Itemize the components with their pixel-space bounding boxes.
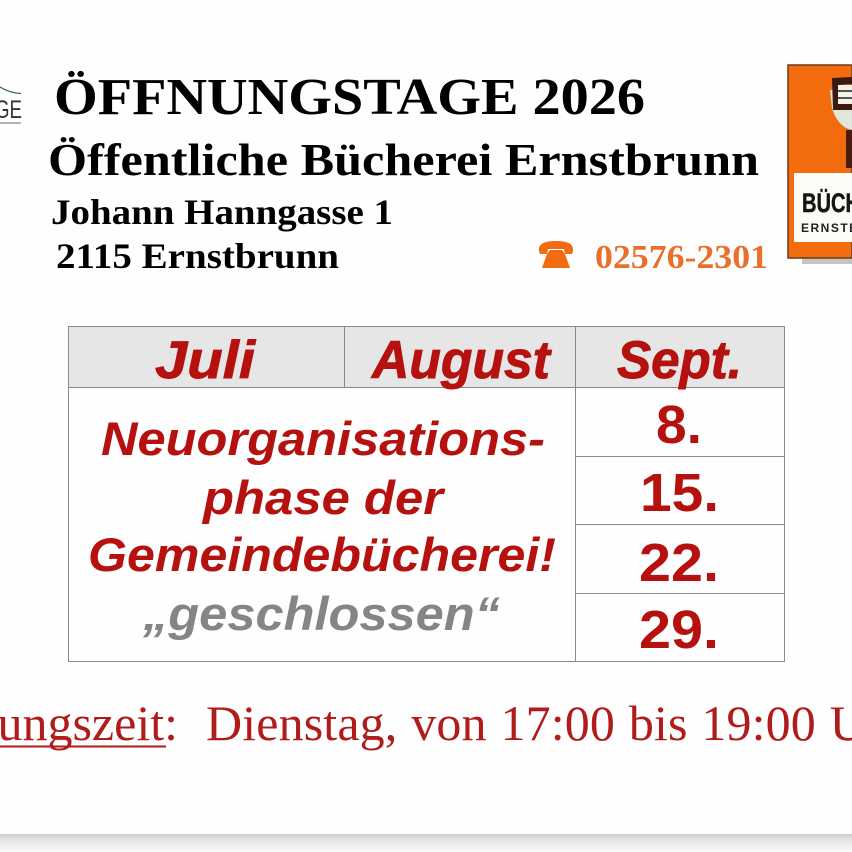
phone contact [539,239,768,276]
library name: Öffentliche Bücherei Ernstbrunn [48,134,759,185]
phone number: 02576-2301 [595,239,768,276]
address block: 2115 Ernstbrunn [56,236,339,276]
icon: library logo [788,65,852,264]
September dates: 22. [639,533,719,593]
month headers: Juli [155,331,256,390]
month headers: August [370,331,552,390]
table header background [68,326,784,388]
icon: cropped partner logo [0,87,22,124]
table grid [68,326,785,662]
September dates: 8. [656,395,702,455]
closure notice: Neuorganisations- [101,412,545,465]
address block [51,192,393,276]
month headers [155,331,742,390]
September dates [639,395,719,660]
title: ÖFFNUNGSTAGE 2026 [54,69,645,126]
month headers: Sept. [617,331,742,390]
page shadow strip [0,834,852,852]
schedule table [68,326,785,662]
September dates: 15. [640,463,719,523]
icon: telephone [539,241,573,268]
address block: Johann Hanngasse 1 [51,192,393,232]
closure notice: phase der [201,471,446,524]
September dates: 29. [639,600,719,660]
closure notice [88,412,556,640]
closure notice: „geschlossen“ [142,587,501,640]
closure notice: Gemeindebücherei! [88,528,556,581]
